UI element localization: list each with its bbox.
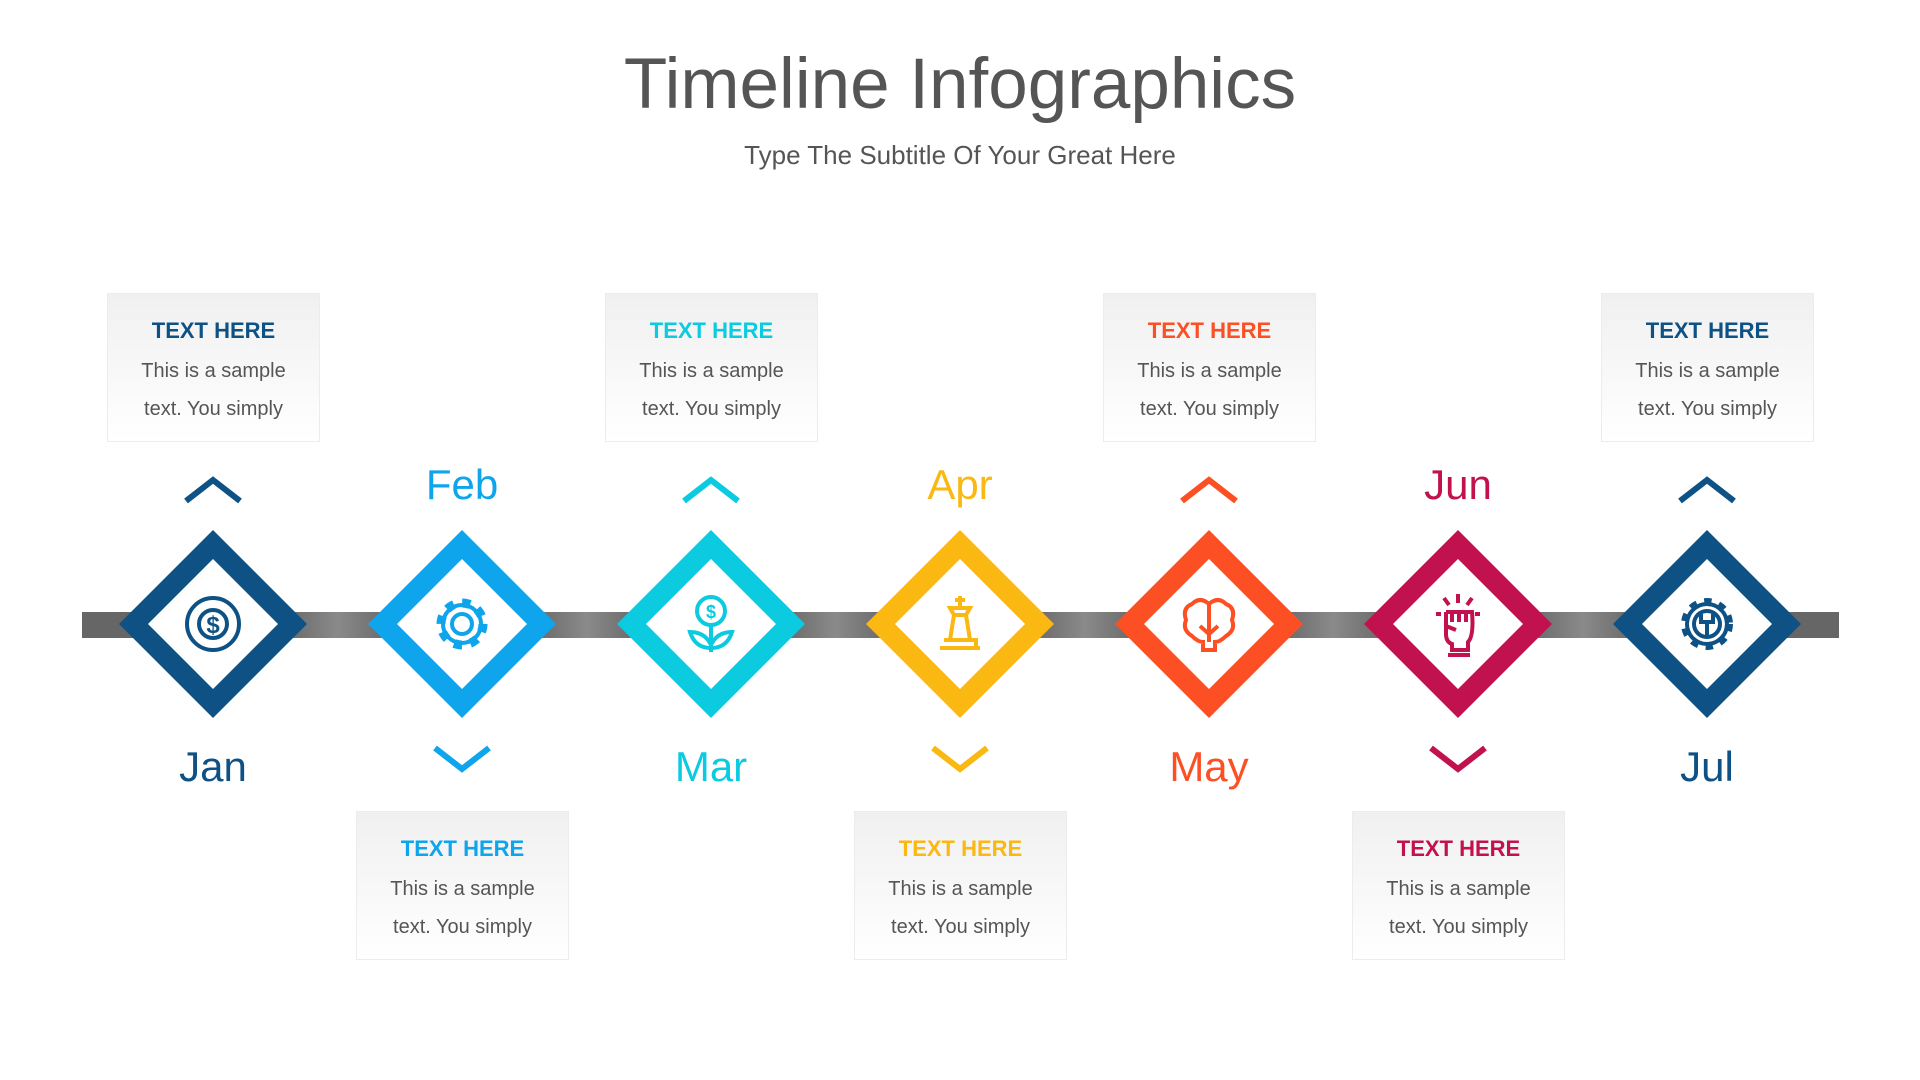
text box: Jul: This is a sample [1635,360,1780,382]
text box: Jan: This is a sample [141,360,286,382]
text box: Apr: TEXT HERE [899,836,1022,861]
text box: Mar: text. You simply [642,398,781,420]
text box: Jan [107,293,320,442]
diamond: May [1115,530,1303,718]
text box: Mar [605,293,818,442]
text box: Feb: text. You simply [393,916,532,938]
icon: money plant: $ [706,602,716,622]
text box: Apr: This is a sample [888,878,1033,900]
chevrons [186,480,1734,769]
text box: Apr [854,811,1067,960]
text box: Jun: TEXT HERE [1397,836,1520,861]
text box: Feb [356,811,569,960]
icon: brain [1185,600,1233,650]
month: Jul: Jul [1680,743,1734,790]
icon: gear [441,603,483,645]
diamond: Jun [1364,530,1552,718]
text box: Mar: This is a sample [639,360,784,382]
diamond: Mar [617,530,805,718]
title: Timeline Infographics [624,45,1296,124]
month: Jun: Jun [1424,461,1492,508]
diamond: Jan [119,530,307,718]
icon: dollar chart [187,598,239,650]
diamond: Jul [1613,530,1801,718]
text box: Jul [1601,293,1814,442]
icon: fist [1436,594,1480,655]
text box: Jun: This is a sample [1386,878,1531,900]
text box: Feb: This is a sample [390,878,535,900]
month: Apr: Apr [927,461,993,508]
text box: Jun: text. You simply [1389,916,1528,938]
text box: May [1103,293,1316,442]
text box: Jun [1352,811,1565,960]
text box: Jan: text. You simply [144,398,283,420]
text box: Jul: TEXT HERE [1646,318,1769,343]
diamond: Feb [368,530,556,718]
month: Feb: Feb [426,461,498,508]
text box: May: This is a sample [1137,360,1282,382]
month: Mar: Mar [675,743,747,790]
month: May: May [1169,743,1249,790]
icon: dollar chart: $ [206,612,220,639]
text box: May: text. You simply [1140,398,1279,420]
text box: Mar: TEXT HERE [650,318,773,343]
icon: chess king [940,596,980,648]
icon: money plant [690,597,732,652]
text box: May: TEXT HERE [1148,318,1271,343]
text box: Jul: text. You simply [1638,398,1777,420]
text box: Jan: TEXT HERE [152,318,275,343]
month: Jan: Jan [179,743,247,790]
timeline bar [82,612,1839,638]
subtitle: Type The Subtitle Of Your Great Here [744,140,1176,170]
text box: Apr: text. You simply [891,916,1030,938]
text box: Feb: TEXT HERE [401,836,524,861]
diamond: Apr [866,530,1054,718]
icon: gear wrench [1685,602,1729,646]
